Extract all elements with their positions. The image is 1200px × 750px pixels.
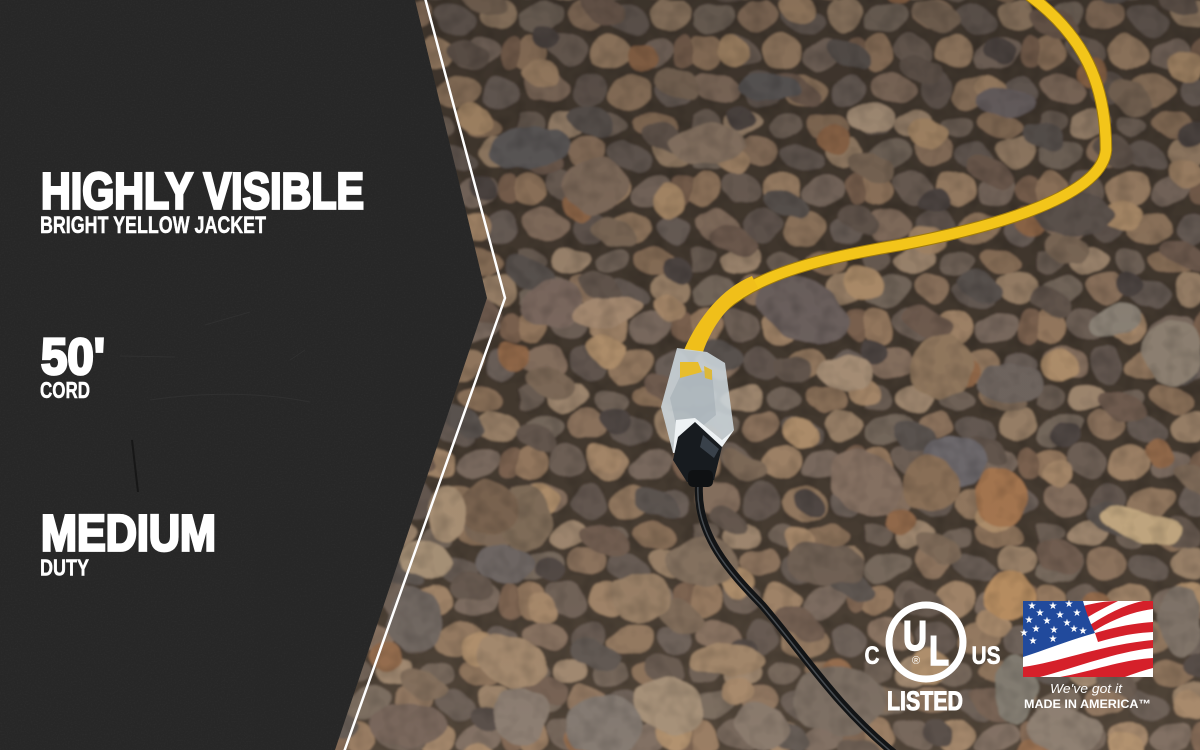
icon: American flag: ★ <box>1050 625 1059 636</box>
icon: American flag: ★ <box>1049 634 1058 645</box>
dark chevron panel <box>0 0 500 750</box>
length value: 50' <box>41 328 105 385</box>
white chevron line <box>344 0 505 750</box>
black plug body <box>673 422 722 487</box>
yellow extension cord <box>684 0 1106 352</box>
feature: highly visible <box>40 162 364 239</box>
UL listed certification mark: L <box>929 627 949 674</box>
icon: American flag: ★ <box>1028 601 1037 612</box>
UL listed certification mark: LISTED <box>887 686 963 716</box>
UL listed certification mark: ® <box>912 655 920 667</box>
length label: CORD <box>40 377 90 403</box>
icon: American flag: ★ <box>1025 615 1034 626</box>
icon: American flag: ★ <box>1070 624 1079 635</box>
duty value: MEDIUM <box>41 504 216 562</box>
feature: cord length <box>40 328 105 403</box>
icon: American flag: ★ <box>1029 636 1038 647</box>
UL listed certification mark: C <box>864 642 880 670</box>
UL listed certification mark <box>864 605 1000 716</box>
icon: American flag: ★ <box>1043 616 1052 627</box>
feature: duty rating <box>40 504 216 580</box>
icon: American flag: ★ <box>1056 610 1065 621</box>
duty label: DUTY <box>40 554 89 580</box>
made in America badge <box>1020 599 1153 711</box>
prominent pebbles <box>370 76 1200 750</box>
icon: American flag: ★ <box>1065 599 1074 610</box>
heading: HIGHLY VISIBLE <box>41 162 364 220</box>
UL listed certification mark: US <box>972 642 1000 670</box>
made in America label: MADE IN AMERICA™ <box>1024 697 1151 711</box>
icon: American flag: ★ <box>1036 608 1045 619</box>
UL listed certification mark: U <box>903 612 927 659</box>
icon: American flag: ★ <box>1049 601 1058 612</box>
black power cord <box>698 485 895 750</box>
icon: American flag: ★ <box>1063 618 1072 629</box>
clear lighted plug end <box>661 348 734 453</box>
icon: American flag: ★ <box>1020 628 1029 639</box>
icon: American flag: ★ <box>1032 624 1041 635</box>
subheading: BRIGHT YELLOW JACKET <box>40 212 266 239</box>
icon: American flag: ★ <box>1079 626 1088 637</box>
icon: American flag: ★ <box>1073 608 1082 619</box>
icon: American flag <box>1020 599 1153 677</box>
tagline: We've got it <box>1050 682 1123 696</box>
